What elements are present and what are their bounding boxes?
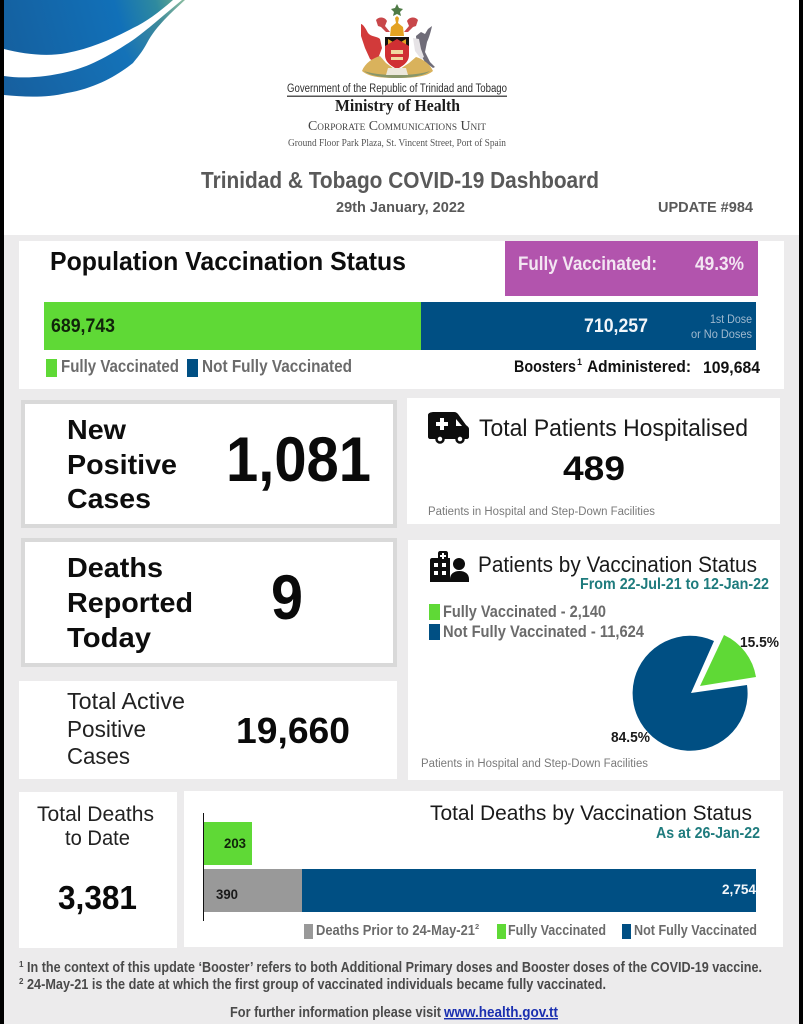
boosters administered [514, 357, 761, 377]
footer link line: For further information please visit [230, 1005, 441, 1021]
label: Reported [67, 587, 193, 618]
stacked bar: or No Doses [691, 327, 752, 341]
icon: hospital and person [430, 551, 469, 582]
government line: Government of the Republic of Trinidad and Tobago [287, 83, 507, 95]
panel: total deaths to date [19, 792, 177, 948]
ministry name: Ministry of Health [335, 96, 460, 115]
footer link line: www.health.gov.tt [443, 1005, 558, 1021]
legend: Not Fully Vaccinated [202, 356, 352, 376]
label: Positive [67, 716, 146, 742]
boosters administered: Administered: [587, 357, 691, 376]
heading: Patients by Vaccination Status [478, 552, 757, 577]
stacked bar: 710,257 [584, 316, 648, 337]
decorative blue wave [4, 0, 185, 97]
caption: Patients in Hospital and Step-Down Facilities [428, 506, 655, 518]
bar chart: 2,754 [722, 882, 756, 897]
legend: Not Fully Vaccinated [634, 922, 757, 939]
label [37, 803, 154, 850]
label: New [67, 414, 126, 445]
legend: 2 [475, 922, 479, 931]
heading: Total Patients Hospitalised [479, 415, 748, 442]
value: 19,660 [236, 710, 350, 751]
label [67, 688, 185, 769]
value: 1,081 [226, 425, 371, 495]
address: Ground Floor Park Plaza, St. Vincent Street, Port of Spain [288, 138, 506, 149]
legend [429, 603, 645, 641]
bar chart [203, 813, 756, 921]
footnotes: 1 [19, 960, 24, 969]
stacked bar: 689,743 [51, 316, 115, 337]
heading: Population Vaccination Status [50, 246, 406, 276]
value: 3,381 [58, 879, 137, 916]
panel: population vaccination status [19, 241, 784, 389]
icon: ambulance [428, 412, 469, 442]
date: 29th January, 2022 [336, 199, 465, 216]
legend: Fully Vaccinated - 2,140 [443, 603, 606, 621]
pie chart: 15.5% [740, 635, 779, 651]
legend: Fully Vaccinated [508, 922, 606, 939]
label: Cases [67, 743, 130, 769]
boosters administered: 1 [577, 357, 582, 367]
boosters administered: 109,684 [703, 358, 761, 377]
callout: fully vaccinated percent: 49.3% [695, 254, 744, 275]
footnotes [19, 960, 762, 993]
pie chart [611, 635, 779, 751]
date range: From 22-Jul-21 to 12-Jan-22 [580, 576, 769, 593]
label: to Date [65, 827, 130, 850]
bar chart: 390 [216, 887, 238, 902]
title: Trinidad & Tobago COVID-19 Dashboard [201, 167, 599, 193]
panel: total deaths by vaccination status [184, 791, 783, 947]
callout: fully vaccinated percent: Fully Vaccinated: [518, 254, 657, 275]
label [67, 414, 177, 514]
callout: fully vaccinated percent [505, 241, 758, 296]
panel: total patients hospitalised [407, 398, 780, 524]
legend: Fully Vaccinated [61, 356, 179, 376]
label [67, 552, 193, 653]
legend [304, 922, 757, 939]
stacked bar [44, 302, 756, 350]
label: Positive [67, 449, 177, 480]
footnotes: 2 [19, 977, 24, 986]
legend: Deaths Prior to 24-May-21 [316, 922, 475, 939]
legend [46, 356, 352, 377]
panel: total active positive cases [19, 681, 397, 779]
value: 489 [563, 450, 625, 488]
as-at date: As at 26-Jan-22 [656, 825, 760, 842]
boosters administered: Boosters [514, 357, 576, 376]
label: Deaths [67, 552, 163, 583]
label: Cases [67, 483, 151, 514]
panel: new positive cases [23, 402, 395, 526]
panel: patients by vaccination status [408, 540, 780, 780]
heading: Total Deaths by Vaccination Status [430, 801, 752, 825]
legend: Not Fully Vaccinated - 11,624 [443, 623, 645, 641]
label: Today [67, 622, 151, 653]
bar chart: 203 [224, 836, 246, 851]
footnotes: 24-May-21 is the date at which the first group of vaccinated individuals became fully vaccinated. [27, 977, 606, 993]
label: Total Active [67, 688, 185, 714]
unit name: Corporate Communications Unit [308, 118, 487, 133]
icon: coat of arms [361, 4, 435, 78]
stacked bar: 1st Dose [710, 312, 752, 326]
label: Total Deaths [37, 803, 154, 826]
pie chart: 84.5% [611, 730, 650, 746]
ministry letterhead [287, 83, 507, 149]
value: 9 [271, 563, 303, 633]
update number: UPDATE #984 [658, 199, 754, 216]
caption: Patients in Hospital and Step-Down Facilities [421, 758, 648, 770]
panel: deaths reported today [23, 540, 395, 665]
